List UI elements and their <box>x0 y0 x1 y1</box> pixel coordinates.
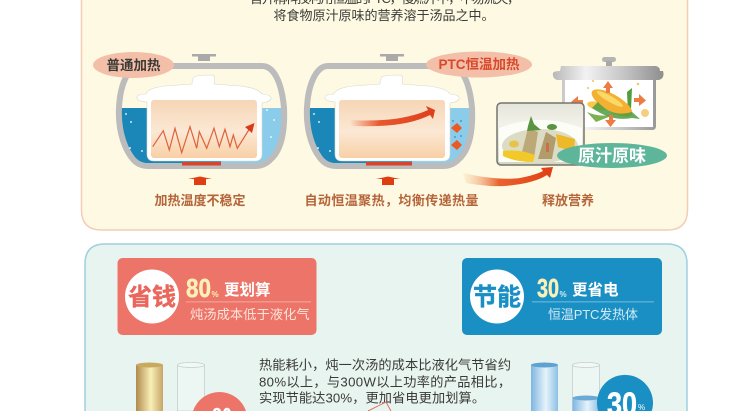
figure: 80%: 80 <box>186 273 211 303</box>
arrow: release nutrients <box>463 167 553 186</box>
description text: 实现节能达30%，更加省电更加划算。 <box>259 390 485 406</box>
panel: money and energy saving <box>85 244 687 411</box>
diagram: PTC constant temperature pot <box>303 54 482 185</box>
heading: 更省电: 更省电 <box>572 281 619 299</box>
badge: 节能: 节能 <box>473 284 521 311</box>
intro text: 将食物原汁原味的营养溶于汤品之中。 <box>274 8 494 23</box>
badge: 节能 <box>470 270 524 324</box>
figure: 80%: % <box>212 290 219 299</box>
label: 原汁原味 <box>557 143 667 168</box>
label: PTC恒温加热: PTC恒温加热 <box>438 56 520 72</box>
up arrow <box>188 176 212 185</box>
badge: 省钱: 省钱 <box>128 284 176 311</box>
caption: release nutrients: 释放营养 <box>542 193 594 208</box>
subtext: 恒温PTC发热体 <box>548 307 638 322</box>
label: 普通加热 <box>93 52 174 78</box>
chart: gold cylinders 80% <box>136 362 246 411</box>
pot lid handle <box>192 54 216 61</box>
figure: 30%: % <box>560 290 567 299</box>
heading: 更划算: 更划算 <box>224 280 271 299</box>
unstable temperature zigzag <box>153 127 250 153</box>
card: save energy <box>462 258 662 335</box>
photo: soup bowl <box>497 103 584 165</box>
label: 普通加热: 普通加热 <box>106 57 161 73</box>
panel: PTC heating comparison <box>82 0 688 230</box>
inner pot <box>137 75 271 161</box>
chart: blue cylinders 30% <box>531 362 653 411</box>
heating plate <box>182 162 221 166</box>
balanced heat arrow <box>350 106 435 126</box>
aroma arrows <box>571 81 646 127</box>
description text: 热能耗小，炖一次汤的成本比液化气节省约 <box>259 358 511 372</box>
diagram: ordinary heating pot <box>115 54 291 185</box>
intro text <box>250 0 520 23</box>
description text <box>259 358 511 406</box>
subtext: 炖汤成本低于液化气 <box>190 307 310 322</box>
caption: even heat: 自动恒温聚热，均衡传递热量 <box>304 193 478 208</box>
badge: 省钱 <box>125 270 179 324</box>
figure: 30%: 30 <box>537 273 559 303</box>
caption: unstable temperature: 加热温度不稳定 <box>154 193 246 208</box>
label: 原汁原味: 原汁原味 <box>578 146 646 166</box>
label: PTC恒温加热 <box>426 52 532 78</box>
badge: 30% <box>597 375 653 411</box>
corn <box>586 84 649 122</box>
icon: red stamp outline <box>368 402 391 411</box>
heat sparks <box>451 123 462 133</box>
card: save money <box>118 258 316 335</box>
icon: steel pot with corn <box>553 57 664 130</box>
description text: 80%以上，与300W以上功率的产品相比， <box>259 374 511 390</box>
